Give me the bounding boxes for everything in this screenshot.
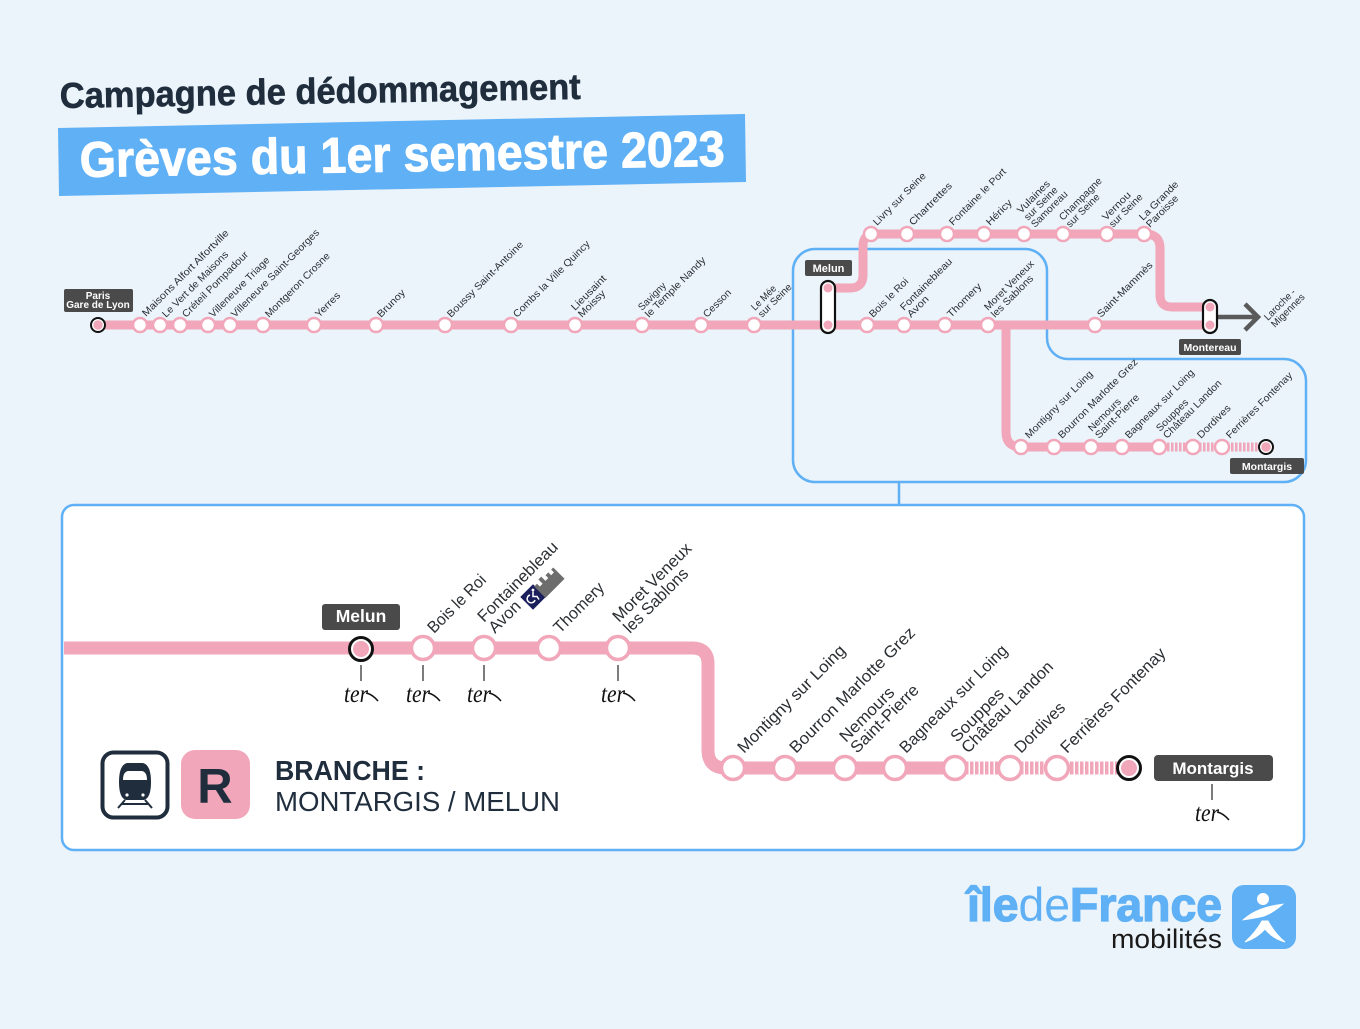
detail line map (64, 636, 1140, 780)
text: branch name: BRANCHE : (275, 755, 425, 786)
interchange: Montereau (1203, 300, 1217, 333)
label: Boussy Saint-Antoine (445, 239, 526, 320)
tag: Montargis detail: Montargis (1172, 759, 1254, 778)
label: Yerres (313, 290, 343, 320)
label: Château Landon (958, 658, 1057, 757)
terminus: Montargis (1259, 440, 1273, 454)
lower branch to Souppes (1006, 325, 1159, 447)
ter: Montargis (1195, 784, 1229, 827)
label: Montgeron Crosne (263, 251, 333, 320)
tag: Montereau: Montereau (1183, 342, 1237, 354)
logo: person icon (1232, 885, 1296, 949)
tag: Montereau (1179, 339, 1241, 355)
tag: Melun detail (322, 604, 400, 630)
ter: Moret (601, 665, 635, 708)
label: Souppes (947, 685, 1008, 746)
terminus: Melun (350, 638, 372, 660)
label: Migennes (1269, 292, 1308, 330)
label: Le Vert de Maisons (160, 249, 231, 320)
label: Moret Veneux (982, 259, 1037, 313)
label: Avon (485, 597, 525, 637)
ter: Melun: ter (344, 681, 368, 708)
label: Maisons Alfort Alfortville (140, 228, 232, 319)
icon: line R (181, 750, 250, 819)
label: Fontaine le Port (947, 166, 1009, 228)
label: Saint-Pierre (1093, 392, 1142, 441)
lower branch single-track section (1159, 442, 1262, 452)
detail station labels (424, 538, 1170, 757)
label: Fontainebleau (898, 257, 955, 313)
label: Paroisse (1144, 193, 1181, 230)
icon: accessibility and castle at Fontainebleau (520, 566, 565, 610)
title banner: Grèves du 1er semestre 2023 (79, 121, 725, 188)
label: Dordives (1011, 699, 1069, 757)
label: Créteil Pompadour (180, 249, 252, 320)
label: Moret Veneux (609, 539, 696, 626)
callout connector (898, 482, 900, 506)
label: Bourron Marlotte Grez (786, 624, 919, 757)
label (1015, 179, 1070, 230)
ter: Fontainebleau (467, 665, 501, 708)
label: Nemours (1086, 397, 1124, 434)
label: Bagneaux sur Loing (1123, 368, 1197, 441)
label: Bois le Roi (424, 571, 490, 637)
label: Villeneuve Saint-Georges (229, 227, 322, 320)
label: Château Landon (1161, 378, 1224, 441)
ter: Bois le Roi: ter (406, 681, 430, 708)
tag: Melun: Melun (813, 263, 845, 275)
label: Villeneuve Triage (207, 255, 273, 320)
label: Fontainebleau (474, 538, 562, 626)
ter: Fontainebleau: ter (467, 681, 491, 708)
upper branch via Héricy (828, 234, 1210, 307)
label: Montigny sur Loing (1023, 369, 1095, 441)
overview station labels (140, 166, 1308, 441)
label: Vernou (1100, 190, 1134, 223)
arrow to Laroche-Migennes (1216, 304, 1258, 330)
label: Avon (905, 294, 932, 320)
label: Bois le Roi (867, 276, 911, 320)
panel: branch detail (62, 505, 1304, 850)
title: campaign heading: Campagne de dédommagement (59, 66, 581, 116)
label: les Sablons (620, 565, 692, 637)
callout outline: zoomed section (793, 249, 1306, 482)
tag: Paris Gare de Lyon: Gare de Lyon (66, 300, 130, 311)
label: les Sablons (989, 273, 1036, 320)
label: Ferrières Fontenay (1224, 370, 1295, 441)
label: sur Seine (756, 282, 795, 320)
label: Thomery (550, 578, 609, 637)
ter connections (344, 665, 1229, 827)
label: Dordives (1195, 403, 1234, 441)
tag: Paris Gare de Lyon (64, 289, 133, 312)
lower branch stations (1014, 440, 1229, 454)
label: sur Seine (1022, 185, 1061, 223)
label: Nemours (836, 684, 898, 746)
label: Héricy (984, 198, 1015, 228)
label: Souppes (1154, 397, 1191, 434)
label: Champagne (1057, 175, 1105, 223)
tag: Montargis detail (1154, 755, 1273, 781)
label: Vulaines (1015, 179, 1053, 216)
overview line map (91, 227, 1273, 454)
logo: Île-de-France Mobilités wordmark: mobilités (1111, 924, 1222, 954)
icon: train (102, 752, 168, 818)
detail single-track section (955, 762, 1122, 774)
label: Bourron Marlotte Grez (1056, 357, 1140, 441)
main line stations (133, 318, 1102, 332)
ter: Melun (344, 665, 378, 708)
label: Samoreau (1029, 189, 1070, 230)
label: Le Mée (749, 283, 779, 313)
terminus: Montargis (1118, 756, 1140, 780)
terminus: Paris (91, 318, 105, 332)
ter: Montargis: ter (1195, 800, 1219, 827)
tag: Melun detail: Melun (336, 606, 386, 626)
label: La Grande (1137, 179, 1182, 223)
logo: Île-de-France Mobilités wordmark (965, 878, 1222, 954)
logo: Île-de-France Mobilités wordmark: îledeFrance (965, 878, 1222, 931)
label: Saint-Mammès (1095, 260, 1155, 320)
detail line (64, 648, 955, 768)
label: Savigny (636, 281, 669, 313)
tag: Montargis: Montargis (1242, 461, 1292, 473)
tag: Melun (805, 260, 852, 276)
upper branch stations (864, 227, 1151, 241)
label: Laroche - (1262, 287, 1298, 323)
label: sur Seine (1064, 192, 1103, 230)
label: Moissy (576, 288, 608, 320)
ter: Moret: ter (601, 681, 625, 708)
text: branch name: MONTARGIS / MELUN (275, 786, 560, 817)
label: le Temple Nandy (643, 255, 708, 320)
label: Bagneaux sur Loing (896, 642, 1011, 757)
label: Saint-Pierre (847, 681, 923, 757)
tag: Paris Gare de Lyon: Paris (86, 291, 111, 302)
label: Montigny sur Loing (734, 642, 849, 757)
interchange: Melun (821, 281, 835, 333)
main line (98, 320, 1210, 330)
label: Lieusaint (569, 273, 609, 313)
label: Combs la Ville Quincy (511, 239, 593, 320)
detail stations (412, 636, 1068, 780)
label (569, 273, 609, 320)
label: Thomery (945, 281, 984, 320)
text: branch name (275, 755, 560, 817)
label: Cesson (701, 288, 734, 320)
label: sur Seine (1107, 192, 1146, 230)
label: Livry sur Seine (871, 171, 929, 228)
label: Ferrières Fontenay (1057, 644, 1170, 757)
icon: line R: R (197, 760, 233, 814)
label: Chartrettes (907, 181, 955, 228)
tag: Montargis (1230, 458, 1304, 474)
ter: Bois le Roi (406, 665, 440, 708)
label: Brunoy (375, 288, 408, 320)
